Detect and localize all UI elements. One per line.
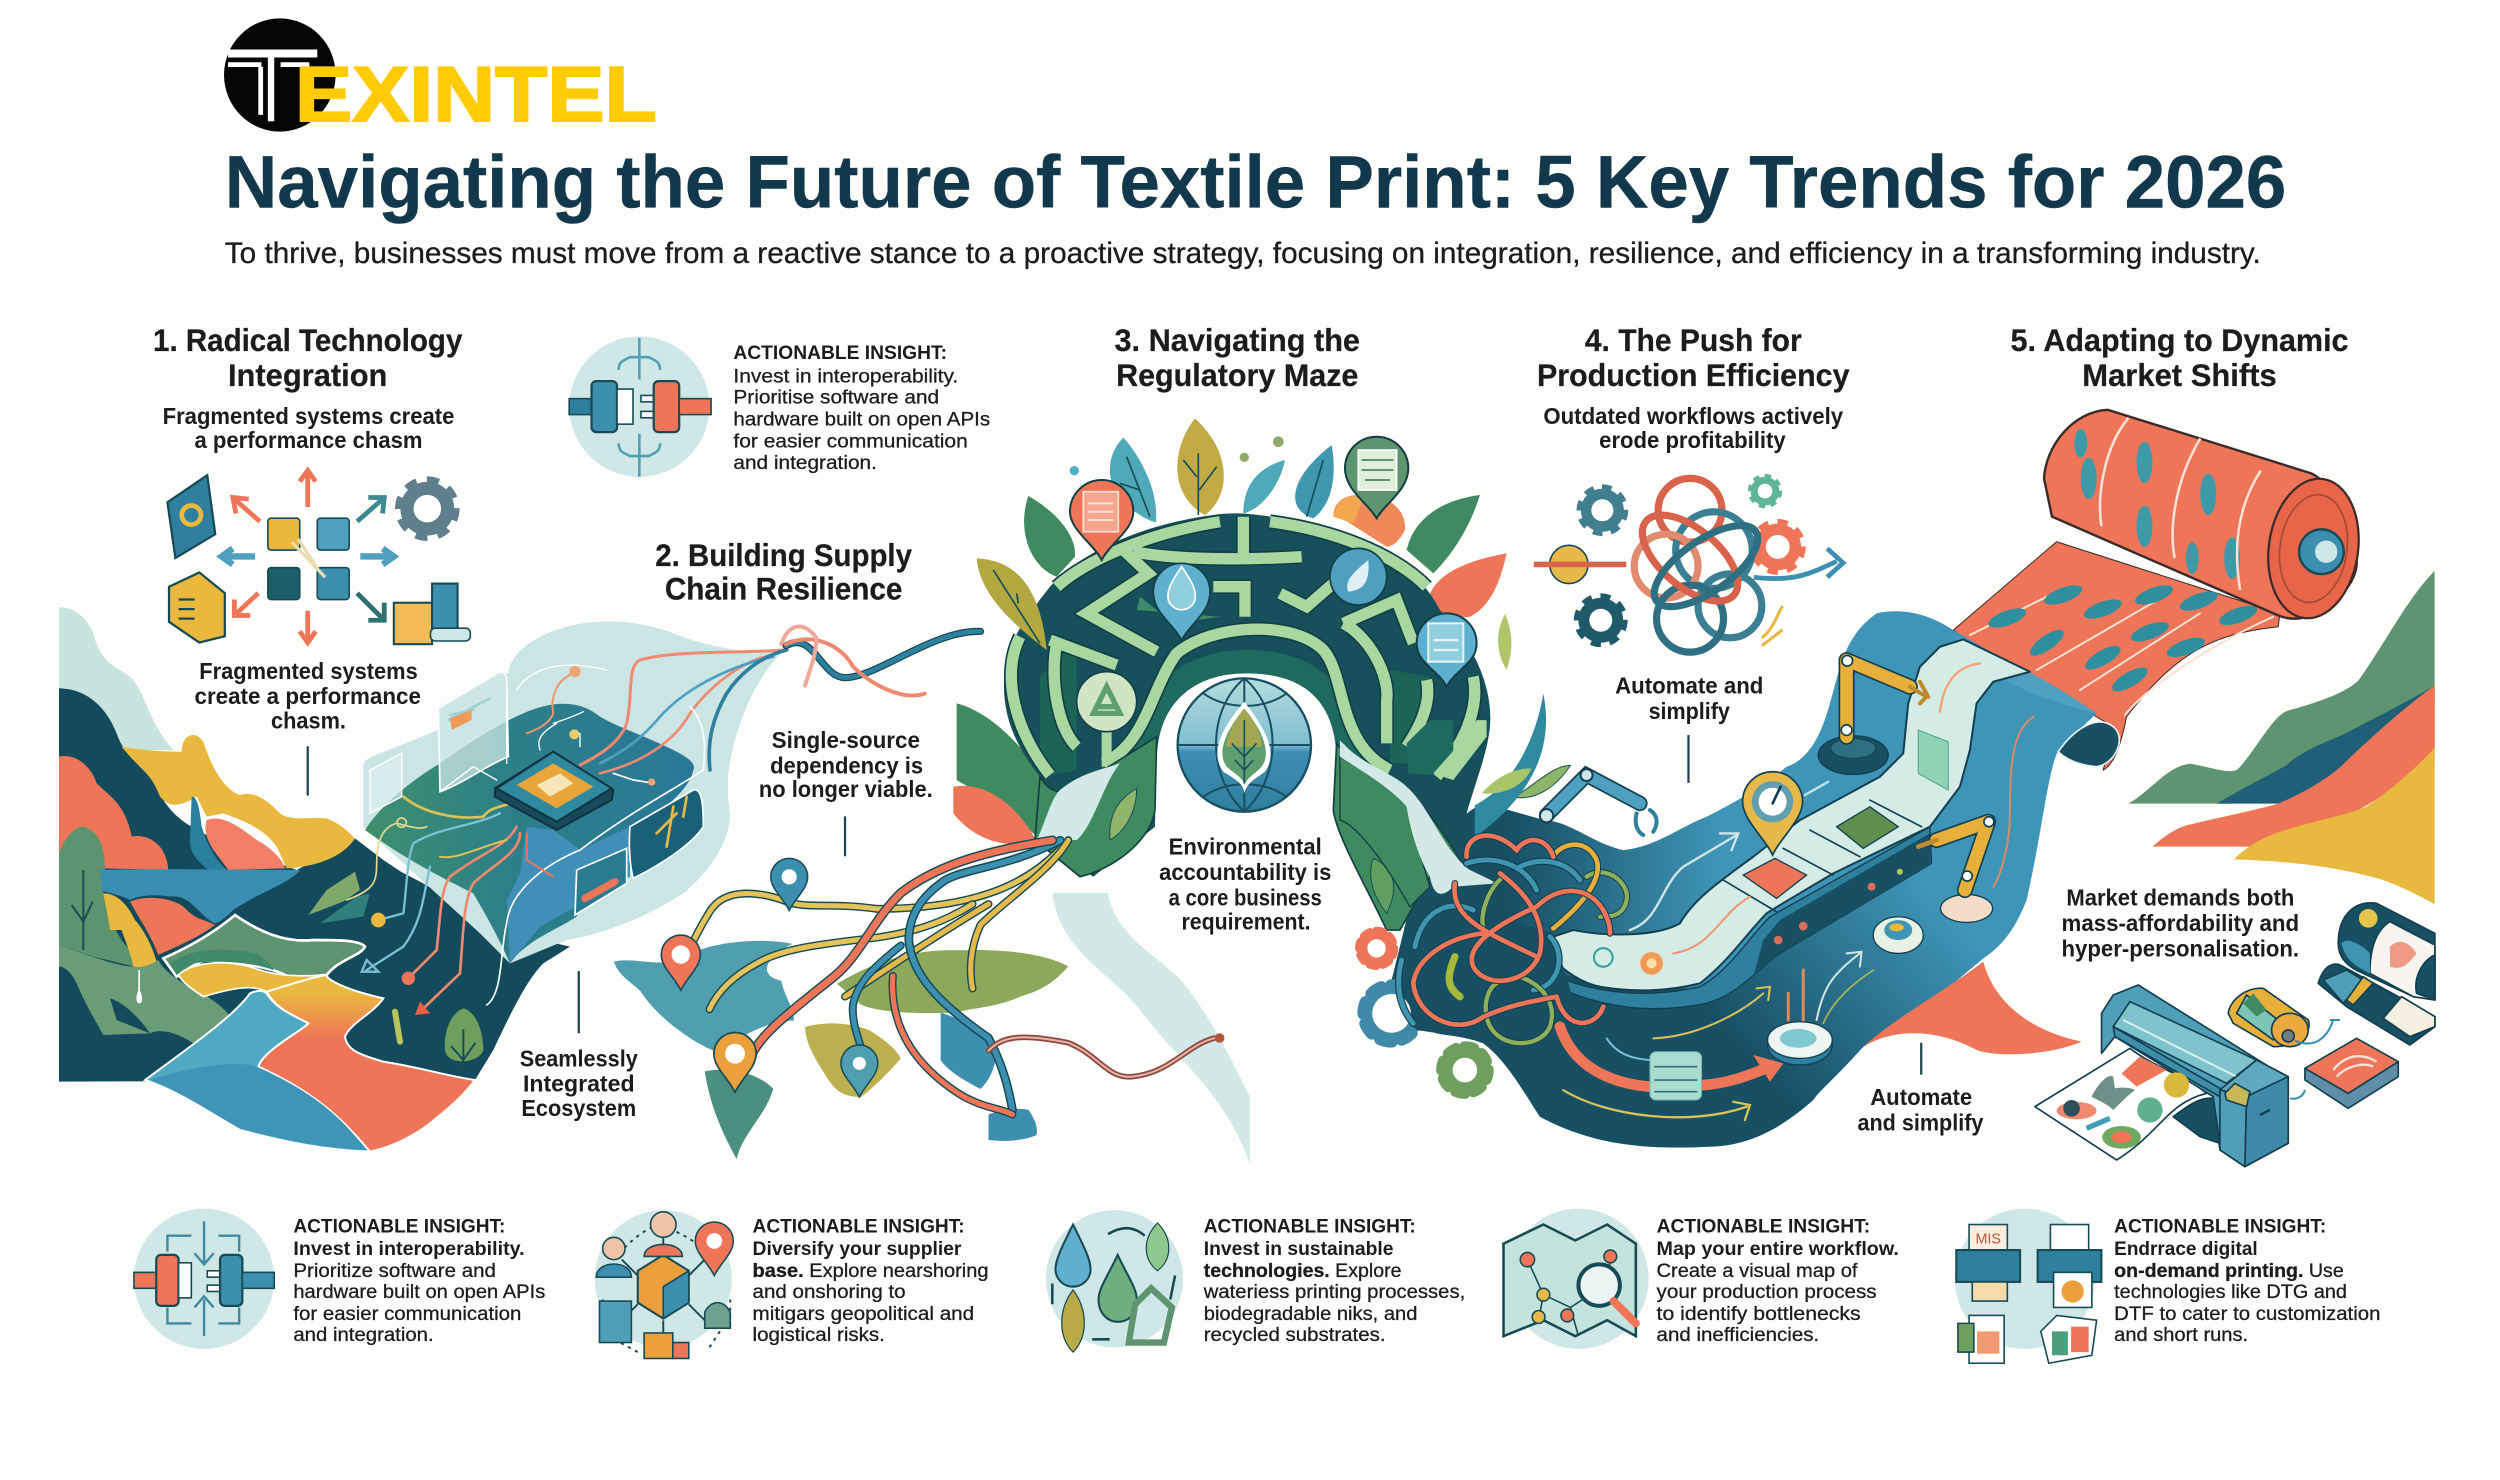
callout: automate and simplify, lower: and simplify	[1857, 1109, 1984, 1135]
text: bottom insight 2: logistical risks.	[753, 1324, 885, 1346]
text: bottom insight 2: Diversify your supplier	[753, 1238, 962, 1260]
heading: trend 3: 3. Navigating the	[1114, 323, 1360, 358]
text: bottom insight 2: base. Explore nearshoring	[753, 1260, 989, 1282]
text: bottom insight 1	[293, 1216, 545, 1346]
illustration: digital printer and rolls	[2035, 903, 2435, 1167]
callout: seamlessly integrated ecosystem: Seamlessly	[520, 1046, 638, 1072]
illustration: world map	[614, 941, 1068, 1159]
illustration: production ribbon and conveyor	[1390, 542, 2280, 1148]
callout: automate and simplify, lower	[1857, 1043, 1984, 1135]
callout: single-source dependency: Single-source	[772, 727, 920, 753]
illustration: tangled workflow knot, top	[1534, 477, 1843, 652]
logo: Texintel: EXINTEL	[295, 50, 657, 138]
text: bottom insight 4: ACTIONABLE INSIGHT:	[1657, 1216, 1870, 1238]
illustration: tangled knot and gears, lower	[1359, 836, 1627, 1094]
text: bottom insight 4: and inefficiencies.	[1657, 1324, 1819, 1346]
text: bottom insight 4: to identify bottlenecks	[1657, 1303, 1861, 1325]
text: bottom insight 3: Invest in sustainable	[1204, 1238, 1394, 1260]
heading: trend 4	[1537, 323, 1850, 393]
callout: environmental accountability: Environmental	[1169, 834, 1322, 860]
text: bottom insight 5: and short runs.	[2114, 1324, 2248, 1346]
icon cluster: fragmented systems	[167, 470, 470, 644]
logo: Texintel	[218, 13, 662, 138]
text: bottom insight 5: DTF to cater to customization	[2114, 1303, 2380, 1325]
text: bottom insight 1: ACTIONABLE INSIGHT:	[293, 1216, 505, 1238]
icon: bottom insight 2, supply network	[595, 1210, 733, 1358]
illustration: pale river	[1052, 893, 1250, 1164]
heading: trend 1: Integration	[228, 358, 387, 393]
callout: fragmented systems: create a performance	[195, 683, 421, 709]
heading: trend 1	[153, 323, 463, 393]
text: bottom insight 5: technologies like DTG and	[2114, 1281, 2347, 1303]
callout: fragmented systems: chasm.	[271, 708, 346, 734]
illustration: right hills	[2129, 571, 2435, 904]
text: top actionable insight: hardware built on open APIs	[733, 409, 990, 431]
text: bottom insight 4: Create a visual map of	[1657, 1260, 1858, 1282]
callout: environmental accountability: accountability is	[1159, 859, 1331, 885]
illustration: knot thread to chain	[781, 627, 981, 695]
heading: trend 4: 4. The Push for	[1585, 323, 1802, 358]
text: bottom insight 4	[1657, 1216, 1899, 1346]
text: bottom insight 1: for easier communication	[293, 1303, 521, 1325]
callout: fragmented systems: Fragmented systems	[199, 658, 418, 684]
icon: plugs, top insight	[569, 336, 711, 477]
text: top actionable insight	[733, 342, 990, 474]
heading: trend 4: Production Efficiency	[1537, 358, 1850, 393]
text: bottom insight 5	[2114, 1216, 2380, 1346]
callout: market demands: hyper-personalisation.	[2062, 936, 2299, 962]
subheading: trend 1: Fragmented systems create	[163, 403, 454, 429]
heading: trend 5: Market Shifts	[2082, 358, 2277, 393]
text: bottom insight 3: ACTIONABLE INSIGHT:	[1204, 1216, 1416, 1238]
heading: trend 3: Regulatory Maze	[1116, 358, 1358, 393]
text: bottom insight 3: recycled substrates.	[1204, 1324, 1386, 1346]
subheading: trend 4: erode profitability	[1599, 427, 1786, 453]
illustration: dark river base	[340, 840, 567, 1080]
callout: environmental accountability	[1159, 834, 1331, 935]
text: bottom insight 1: and integration.	[293, 1324, 434, 1346]
callout: automate and simplify, upper	[1615, 673, 1763, 783]
heading: trend 1: 1. Radical Technology	[153, 323, 463, 358]
text: bottom insight 3: biodegradable niks, and	[1204, 1303, 1417, 1325]
callout: seamlessly integrated ecosystem: Integrated	[523, 1070, 635, 1096]
text: bottom insight 2	[753, 1216, 989, 1346]
callout: environmental accountability: requirement.	[1181, 909, 1311, 935]
text: bottom insight 5: Endrrace digital	[2114, 1238, 2258, 1260]
icon: bottom insight 4, workflow map	[1504, 1209, 1649, 1349]
heading: trend 2: Chain Resilience	[665, 572, 902, 607]
text: bottom insight 1: Invest in interoperability.	[293, 1238, 525, 1260]
heading: trend 5	[2011, 323, 2349, 393]
subheading: trend 4	[1543, 403, 1843, 453]
heading: trend 3	[1114, 323, 1360, 393]
text: bottom insight 1: Prioritize software and	[293, 1260, 496, 1282]
text: bottom insight 3	[1203, 1216, 1465, 1346]
subheading: trend 4: Outdated workflows actively	[1543, 403, 1843, 429]
text: bottom insight 2: and onshoring to	[753, 1281, 906, 1303]
icon: bottom insight 5, digital printing: MIS	[1975, 1232, 2001, 1248]
callout: single-source dependency	[759, 727, 933, 856]
text: top actionable insight: Invest in interoperability.	[733, 366, 958, 388]
callout: automate and simplify, upper: Automate and	[1615, 673, 1763, 699]
text: bottom insight 1: hardware built on open APIs	[293, 1281, 545, 1303]
callout: automate and simplify, upper: simplify	[1649, 698, 1730, 724]
text: top actionable insight: for easier communication	[733, 430, 968, 452]
text: top actionable insight: ACTIONABLE INSIGHT:	[733, 342, 947, 364]
title: Navigating the Future of Textile Print: 5 Key Trends for 2026	[225, 140, 2286, 223]
text: top actionable insight: Prioritise software and	[733, 386, 939, 408]
callout: market demands	[2062, 885, 2299, 962]
subheading: trend 1	[163, 403, 454, 453]
icon: map pins	[661, 858, 878, 1097]
callout: market demands: Market demands both	[2066, 885, 2294, 911]
illustration: coral ribbon tail	[1863, 962, 2082, 1054]
heading: trend 2: 2. Building Supply	[655, 538, 913, 573]
callout: single-source dependency: no longer viable.	[759, 776, 933, 802]
icon: bottom insight 5, digital printing	[1955, 1209, 2101, 1363]
subheading: trend 1: a performance chasm	[195, 427, 423, 453]
text: bottom insight 5: ACTIONABLE INSIGHT:	[2114, 1216, 2326, 1238]
illustration: right leaves and river	[1475, 614, 1570, 837]
illustration: fabric roll	[2044, 410, 2367, 624]
icon: bottom insight 3, sustainability	[1046, 1210, 1183, 1352]
callout: fragmented systems	[195, 658, 421, 796]
callout: automate and simplify, lower: Automate	[1870, 1084, 1972, 1110]
text: bottom insight 5: on-demand printing. Use	[2114, 1260, 2344, 1282]
icon: bottom insight 1, plugs	[134, 1209, 274, 1349]
illustration: regulatory maze arch	[953, 418, 1507, 930]
text: bottom insight 2: ACTIONABLE INSIGHT:	[753, 1216, 965, 1238]
text: bottom insight 2: mitigars geopolitical and	[753, 1303, 974, 1325]
illustration: supply chain cables	[694, 840, 1224, 1115]
illustration: integrated tech board	[347, 622, 787, 1073]
callout: single-source dependency: dependency is	[770, 752, 923, 778]
illustration: fragmented landscape	[59, 607, 570, 1152]
illustration: pale stream into knot	[1340, 720, 1532, 907]
text: bottom insight 3: wateriess printing processes,	[1203, 1281, 1465, 1303]
text: bottom insight 4: Map your entire workflow.	[1657, 1238, 1899, 1260]
callout: seamlessly integrated ecosystem: Ecosystem	[521, 1095, 636, 1121]
callout: environmental accountability: a core business	[1169, 885, 1322, 911]
callout: market demands: mass-affordability and	[2062, 910, 2299, 936]
text: top actionable insight: and integration.	[733, 452, 877, 474]
callout: seamlessly integrated ecosystem	[520, 971, 638, 1121]
subtitle: To thrive, businesses must move from a reactive stance to a proactive strategy, focusing on integration, resilience, and efficiency in a transforming industry.	[225, 237, 2261, 270]
text: bottom insight 3: technologies. Explore	[1204, 1260, 1402, 1282]
illustration: blue robot arm	[1540, 769, 1657, 835]
heading: trend 5: 5. Adapting to Dynamic	[2011, 323, 2349, 358]
heading: trend 2	[655, 538, 913, 607]
text: bottom insight 4: your production process	[1657, 1281, 1877, 1303]
